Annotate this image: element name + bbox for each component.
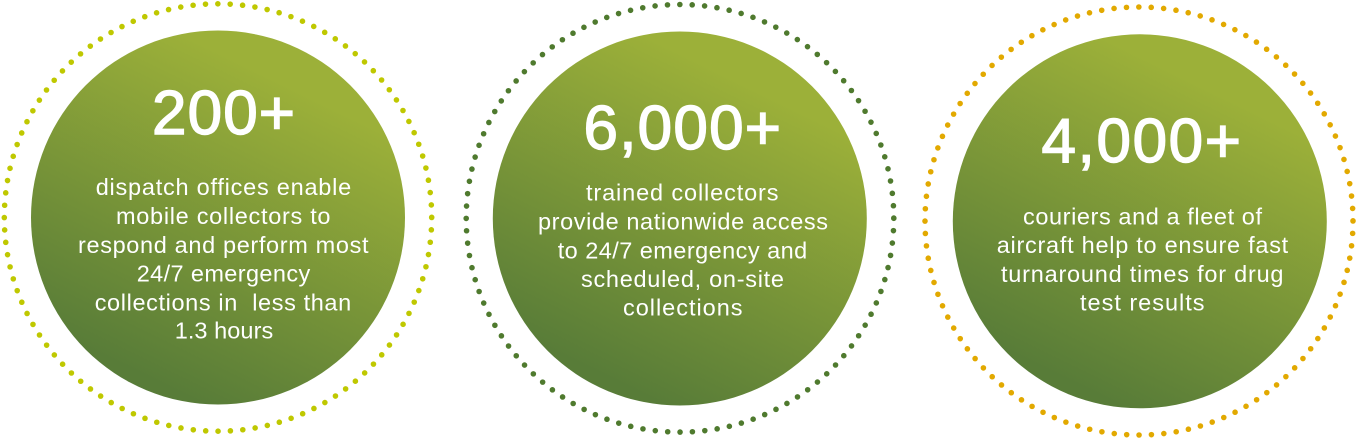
dotted ring: dark green <box>466 4 894 432</box>
stat number: 4,000+: 4,000+ <box>1042 107 1241 176</box>
description: couriers and aircraft: aircraft help to ensure fast <box>997 232 1289 258</box>
dotted ring: lime <box>4 4 432 431</box>
description: dispatch offices: dispatch offices enable <box>96 174 351 200</box>
stat number: 200+: 200+ <box>152 79 295 148</box>
description: trained collectors: provide nationwide access <box>538 208 828 234</box>
gradient disc: middle <box>493 32 867 406</box>
description: dispatch offices <box>78 174 369 344</box>
description: dispatch offices: 1.3 hours <box>175 318 273 344</box>
description: dispatch offices: respond and perform most <box>78 232 369 258</box>
panel: 200+ dispatch offices <box>4 4 432 431</box>
description: dispatch offices: 24/7 emergency <box>137 261 310 287</box>
gradient disc: right <box>953 34 1327 408</box>
description: trained collectors: collections <box>623 295 742 321</box>
description: trained collectors: scheduled, on-site <box>581 266 784 292</box>
gradient disc: left <box>31 30 405 404</box>
description: couriers and aircraft: test results <box>1080 290 1204 316</box>
description: couriers and aircraft <box>997 203 1289 316</box>
panel: 4,000+ couriers <box>925 7 1353 435</box>
description: dispatch offices: mobile collectors to <box>116 203 330 229</box>
description: couriers and aircraft: turnaround times for drug <box>1001 261 1284 287</box>
dotted ring: amber <box>925 7 1353 435</box>
description: trained collectors: trained collectors <box>586 180 778 206</box>
panel: 6,000+ trained collectors <box>466 4 894 432</box>
description: trained collectors <box>538 180 828 321</box>
description: trained collectors: to 24/7 emergency and <box>558 237 807 263</box>
description: dispatch offices: collections in less than <box>95 290 351 316</box>
stat number: 6,000+: 6,000+ <box>584 94 781 163</box>
description: couriers and aircraft: couriers and a fleet of <box>1023 203 1262 229</box>
